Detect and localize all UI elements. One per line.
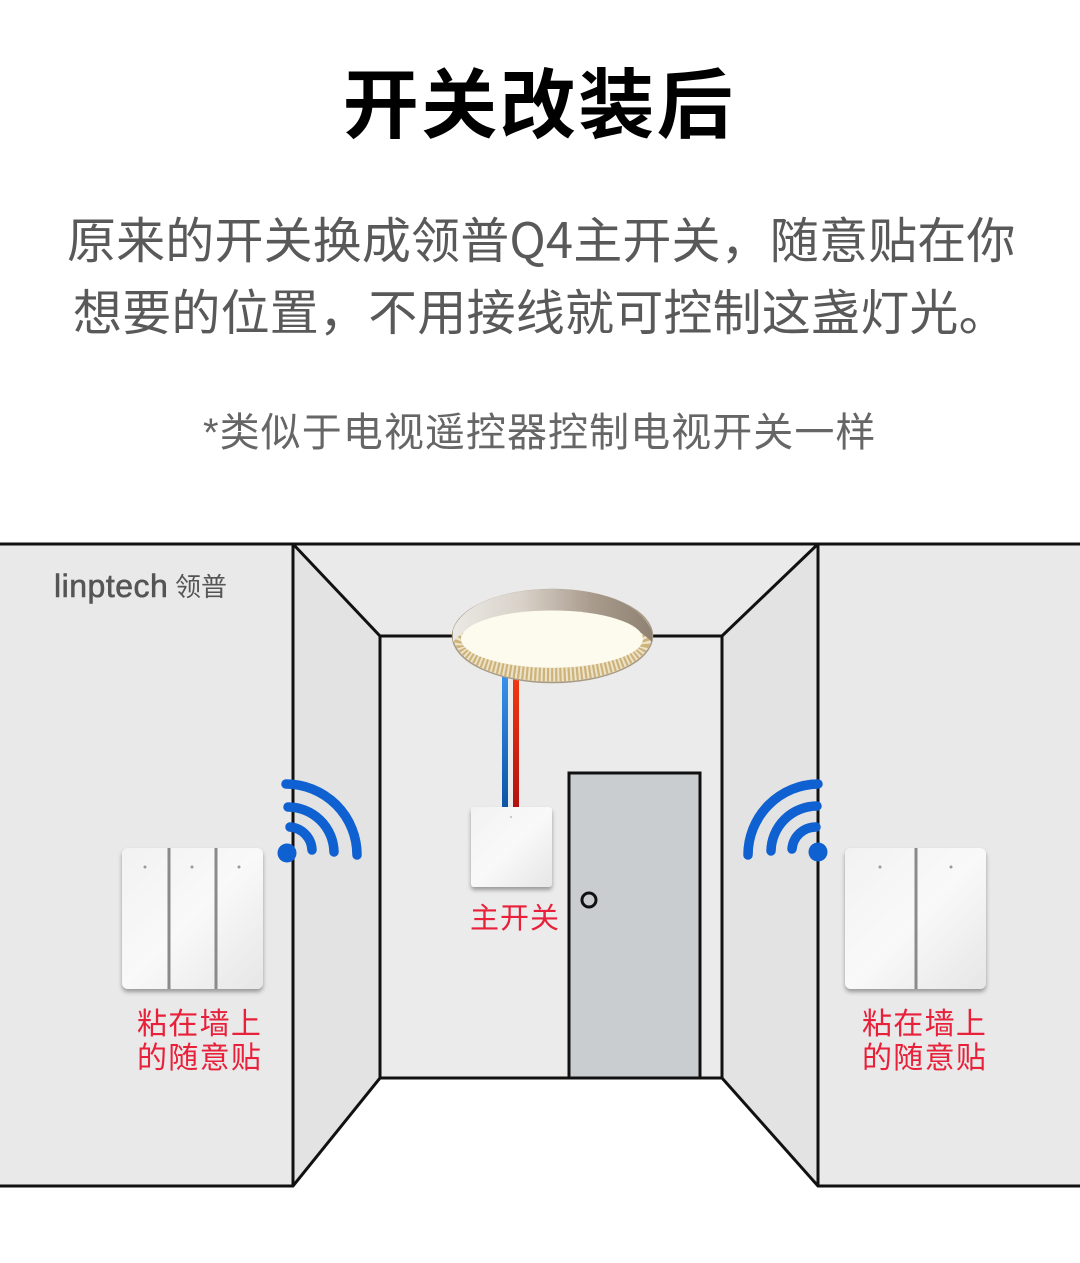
room outlines (0, 544, 1080, 1186)
description text (67, 202, 1016, 345)
right side wall (722, 544, 818, 1186)
title: 开关改装后 (343, 44, 735, 154)
back wall (380, 636, 722, 1078)
wires (502, 676, 519, 807)
main switch label: 主开关 (470, 902, 560, 935)
icon: right wireless signal (748, 784, 828, 862)
logo: linptech (54, 568, 168, 604)
logo: 领普 (175, 572, 227, 602)
right wall (818, 544, 1080, 1186)
door (569, 773, 700, 1078)
right label: 粘在墙上 (862, 1008, 987, 1041)
left three-gang switch (122, 848, 263, 989)
room illustration (0, 544, 1080, 1186)
ceiling (293, 544, 818, 636)
left label: 的随意贴 (137, 1042, 262, 1075)
left label: 粘在墙上 (137, 1008, 262, 1041)
main switch (471, 807, 552, 887)
description text: 想要的位置，不用接线就可控制这盏灯光。 (73, 274, 1008, 345)
left label (137, 1008, 262, 1075)
description text: 原来的开关换成领普Q4主开关，随意贴在你 (67, 202, 1016, 273)
ceiling lamp (452, 589, 652, 682)
right label: 的随意贴 (862, 1042, 987, 1075)
left wall (0, 544, 293, 1186)
logo (54, 568, 227, 604)
left side wall (293, 544, 380, 1186)
right two-gang switch (845, 848, 986, 989)
icon: left wireless signal (278, 784, 357, 862)
right label (862, 1008, 987, 1075)
footnote: *类似于电视遥控器控制电视开关一样 (203, 411, 876, 455)
